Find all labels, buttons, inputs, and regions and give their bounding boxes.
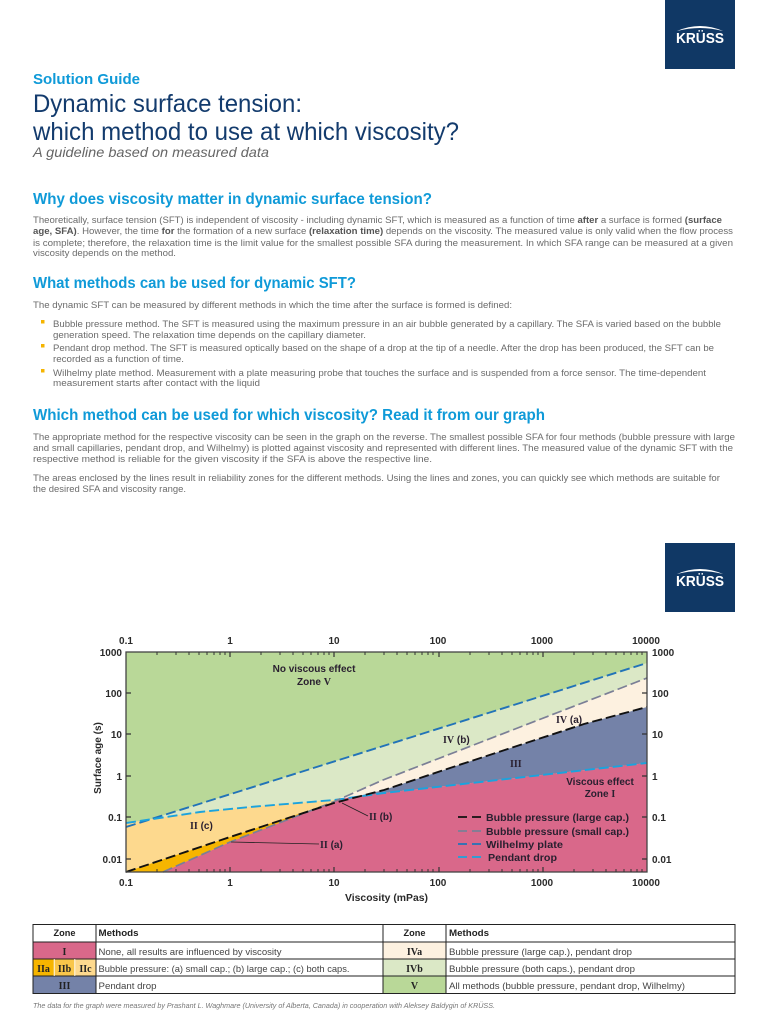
label with leader: II (b): II (b) (369, 812, 392, 823)
label: II (c): II (c) (190, 821, 213, 832)
label with leader: II (a) (231, 840, 343, 851)
title (32, 90, 459, 146)
header row: Zone (404, 928, 425, 938)
left axis labels: 100 (105, 689, 122, 700)
bullet list: methods: Pendant drop method. The SFT is measured optically based on the shape of a drop at the tip of a needle. After the drop has been produced, the SFT can be (53, 343, 714, 353)
zone IVb area (126, 663, 647, 872)
left axis labels: 0.1 (108, 813, 122, 824)
bottom axis labels: 1000 (531, 878, 554, 889)
line: bubble pressure small capillary (163, 678, 647, 872)
chart legend (458, 813, 629, 864)
right axis labels: 0.01 (652, 855, 672, 866)
top axis labels: 10 (328, 636, 340, 647)
right axis labels: 0.1 (652, 813, 666, 824)
footnote: The data for the graph were measured by Prashant L. Waghmare (University of Alberta, Canada) in cooperation with Aleksey Baldygin of KRÜSS. (33, 1002, 495, 1010)
top axis labels: 100 (430, 636, 447, 647)
row: zone V: All methods (bubble pressure, pendant drop, Wilhelmy) (449, 981, 685, 991)
eyebrow: Solution Guide: Solution Guide (33, 71, 140, 88)
top axis labels: 1000 (531, 636, 554, 647)
label: viscous effect: Zone I (585, 789, 615, 800)
bullet list: methods: Bubble pressure method. The SFT is measured using the maximum pressure in an air bubble generated by a capillary. The SFA is varied based on the bubble (53, 319, 721, 329)
row: zone I: None, all results are influenced by viscosity (98, 947, 282, 957)
top axis labels: 1 (227, 636, 233, 647)
chart legend: Bubble pressure (large cap.) (486, 813, 629, 824)
row: zone I: I (63, 947, 67, 958)
line: pendant drop (126, 763, 647, 823)
chart legend: Wilhelmy plate (486, 840, 563, 851)
table: zones and methods (33, 924, 735, 994)
text block: why viscosity matters: viscosity depends on the method. (33, 248, 176, 258)
label: viscous effect: Viscous effect (566, 777, 634, 788)
label: IV (b): IV (b) (443, 735, 470, 746)
table grid (33, 924, 735, 994)
row: zone V: V (411, 981, 419, 992)
logo: KRUSS top (665, 0, 735, 69)
title: Dynamic surface tension: (33, 90, 302, 118)
row: zone II: IIb (58, 964, 72, 975)
top axis labels: 10000 (632, 636, 660, 647)
bottom axis labels: 10 (328, 878, 340, 889)
left axis labels (100, 648, 122, 866)
bullet list: methods: measurement starts after contact with the liquid (53, 378, 260, 388)
title: which method to use at which viscosity? (32, 118, 459, 146)
line: bubble pressure large capillary (126, 707, 647, 872)
bottom axis labels: 100 (430, 878, 447, 889)
text block: why viscosity matters: is complete; therefore, the relaxation time is the limit value for the smallest possible SFA during the measurement. In which SFA range can be measured at a given (33, 238, 733, 248)
label with leader: II (b) (342, 803, 392, 823)
bullet list: methods (41, 319, 721, 388)
zone IIa area (126, 802, 334, 872)
label: no viscous effect (273, 664, 356, 688)
zone III area (345, 707, 647, 799)
zone I area (163, 763, 647, 872)
header row: Methods (449, 928, 489, 938)
y axis title: Surface age (s) (93, 722, 104, 794)
row: zone IVa: IVa (407, 947, 422, 958)
header row (54, 928, 489, 938)
logo: KRUSS top: KRÜSS (676, 30, 724, 47)
zone colour cells (33, 942, 446, 993)
text block: which method: respective method is reliable for the given viscosity if the SFA is above the respective line. (33, 454, 432, 464)
row: zone IVb: Bubble pressure (both caps.), pendant drop (449, 964, 635, 974)
label: no viscous effect: Zone V (297, 677, 332, 688)
label: viscous effect (566, 777, 634, 800)
row: zone III (59, 981, 156, 992)
bullet list: methods: recorded as a function of time. (53, 354, 184, 364)
text block: which method: and small capillaries, pendant drop, and Wilhelmy) is plotted against viscosity and represented with different lines. The measured value of the dynamic SFT with the (33, 443, 733, 453)
row: zone II: Bubble pressure: (a) small cap.; (b) large cap.; (c) both caps. (98, 964, 350, 974)
bullet list: methods: generation speed. The relaxation time depends on the capillary diameter. (53, 330, 366, 340)
left axis labels: 0.01 (103, 855, 122, 866)
row: zone IVa: Bubble pressure (large cap.), pendant drop (449, 947, 632, 957)
bottom axis labels: 10000 (632, 878, 660, 889)
text block: which method: the desired SFA and viscosity range. (33, 484, 186, 494)
subtitle: A guideline based on measured data (32, 144, 269, 160)
label with leader: II (a): II (a) (320, 840, 343, 851)
top axis labels (119, 636, 660, 647)
zone IIc area (126, 797, 346, 872)
line: Wilhelmy plate (126, 663, 647, 827)
heading: why viscosity matters: Why does viscosity matter in dynamic surface tension? (33, 191, 432, 208)
x axis title: Viscosity (mPas) (345, 893, 428, 904)
left axis labels: 10 (111, 730, 122, 741)
chart legend: Pendant drop (488, 853, 557, 864)
text block: which method (33, 432, 735, 494)
chart legend: Bubble pressure (small cap.) (486, 827, 629, 838)
bullet list: methods: Wilhelmy plate method. Measurement with a plate measuring probe that touches the surface and is suspended from a force sensor. The time-dependent (53, 368, 707, 378)
text block: which method: The appropriate method for the respective viscosity can be seen in the graph on the reverse. The smallest possible SFA for four methods (bubble pressure with large (33, 432, 735, 442)
heading: what methods: What methods can be used for dynamic SFT? (33, 275, 356, 292)
label: III: III (510, 759, 522, 770)
label: IV (a): IV (a) (556, 715, 582, 726)
bottom axis labels (119, 878, 660, 889)
logo: KRUSS second (665, 543, 735, 612)
right axis labels: 1 (652, 772, 658, 783)
row: zone III: III (59, 981, 70, 992)
right axis labels: 10 (652, 730, 664, 741)
right axis labels: 100 (652, 689, 669, 700)
left axis labels: 1000 (100, 648, 122, 659)
header row: Methods (98, 928, 138, 938)
header row: Zone (54, 928, 75, 938)
text block: why viscosity matters: age, SFA) . However, the time for the formation of a new surface (relaxation time) depends on the viscosity. The measured value is only valid when the flow process (33, 226, 734, 236)
zone IVa area (340, 678, 647, 800)
heading: which method: Which method can be used for which viscosity? Read it from our graph (33, 407, 545, 424)
left axis labels: 1 (116, 772, 122, 783)
text block: why viscosity matters (33, 215, 734, 258)
row: zone IVb: IVb (406, 964, 423, 975)
top axis labels: 0.1 (119, 636, 133, 647)
bottom axis labels: 0.1 (119, 878, 133, 889)
row: zone II: IIa (37, 964, 50, 975)
text block: why viscosity matters: Theoretically, surface tension (SFT) is independent of viscosity - including dynamic SFT, which is measured as a function of time after a surface is formed (surface (33, 215, 722, 225)
chart: surface age vs viscosity (93, 636, 675, 904)
bottom axis labels: 1 (227, 878, 233, 889)
text block: methods intro: The dynamic SFT can be measured by different methods in which the time after the surface is formed is defined: (33, 300, 512, 310)
right axis labels (652, 648, 675, 866)
row: zone III: Pendant drop (98, 981, 156, 991)
label: no viscous effect: No viscous effect (273, 664, 356, 675)
row: zone II: IIc (79, 964, 92, 975)
plot frame and ticks (126, 652, 647, 872)
text block: which method: The areas enclosed by the lines result in reliability zones for the different methods. Using the lines and zones, you can quickly see which methods are suitable for (33, 473, 720, 483)
right axis labels: 1000 (652, 648, 675, 659)
zone V area (126, 652, 647, 872)
logo: KRUSS second: KRÜSS (676, 573, 724, 590)
